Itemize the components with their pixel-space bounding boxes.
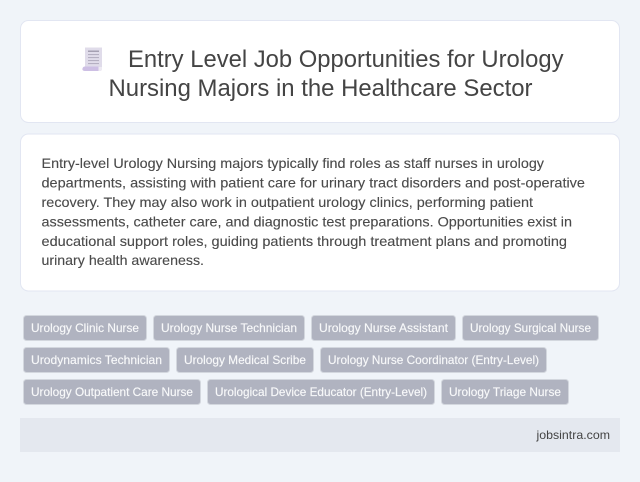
tag: [154, 316, 304, 340]
footer source text: jobsintra.com: [535, 428, 610, 442]
tag: Urology Surgical Nurse: [470, 321, 591, 335]
tag: Urology Nurse Technician: [161, 321, 297, 335]
description text: educational support roles, guiding patients through treatment plans and promoting: [42, 233, 567, 249]
tag: [312, 316, 456, 340]
tag: [320, 348, 546, 372]
icon: document scroll: [82, 48, 102, 71]
description text: [42, 155, 585, 268]
tag: [24, 380, 200, 404]
tag: Urodynamics Technician: [31, 353, 162, 367]
footer: [20, 418, 620, 452]
title text: [108, 46, 564, 102]
tag: [462, 316, 598, 340]
tag: Urology Nurse Assistant: [319, 321, 449, 335]
tag: [208, 380, 434, 404]
tag: Urological Device Educator (Entry-Level): [215, 385, 427, 399]
tag: [176, 348, 314, 372]
description text: Entry-level Urology Nursing majors typically find roles as staff nurses in urology: [42, 155, 544, 171]
job tags: [24, 316, 598, 404]
title text: Nursing Majors in the Healthcare Sector: [108, 75, 532, 102]
panel: description: [20, 134, 620, 291]
tag: Urology Outpatient Care Nurse: [31, 385, 193, 399]
description text: recovery. They may also work in outpatient urology clinics, performing patient: [42, 194, 533, 210]
title text: Entry Level Job Opportunities for Urology: [128, 46, 564, 73]
tag: Urology Nurse Coordinator (Entry-Level): [328, 353, 539, 367]
description text: urinary health awareness.: [42, 252, 204, 268]
tag: [442, 380, 568, 404]
description text: departments, assisting with patient care for urinary tract disorders and post-operative: [42, 174, 585, 190]
tag: Urology Triage Nurse: [449, 385, 561, 399]
tag: Urology Medical Scribe: [184, 353, 306, 367]
tag: [24, 316, 146, 340]
description text: assessments, catheter care, and diagnostic test preparations. Opportunities exist in: [42, 214, 572, 230]
panel: title: [20, 20, 620, 122]
tag: Urology Clinic Nurse: [31, 321, 139, 335]
tag: [24, 348, 170, 372]
